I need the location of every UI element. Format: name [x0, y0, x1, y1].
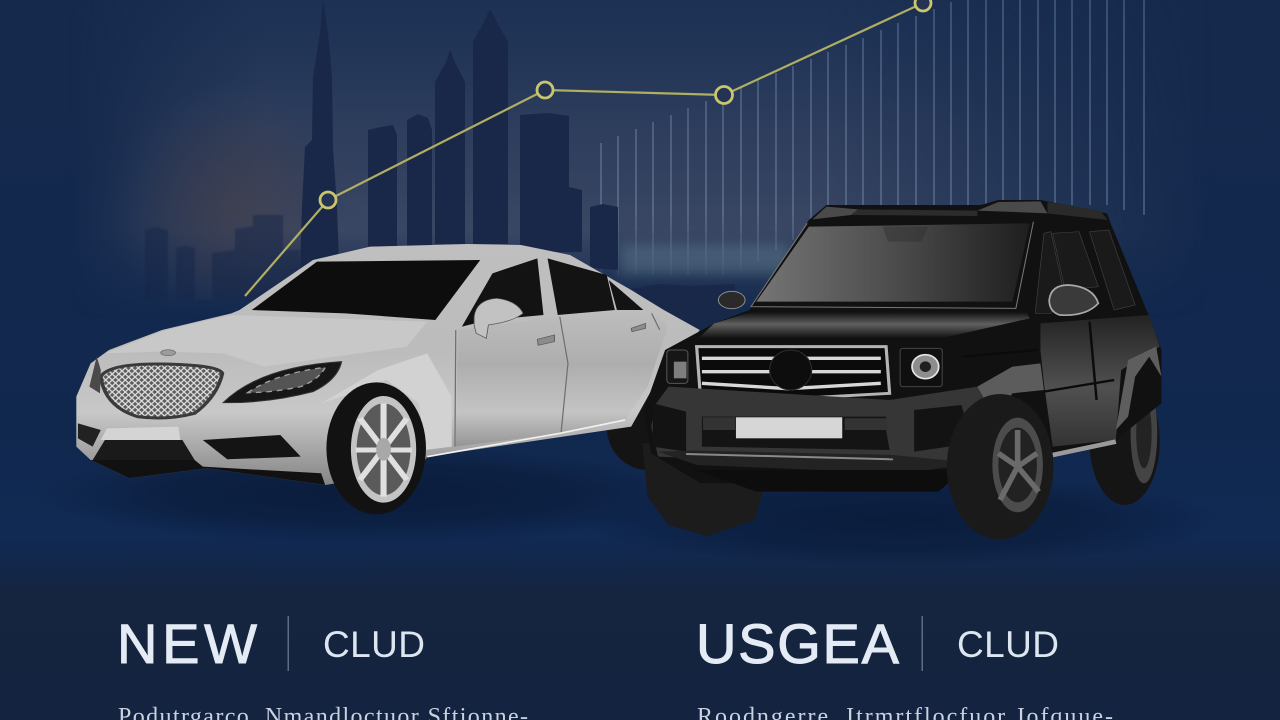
SUV front bumper	[651, 387, 993, 467]
SUV body	[644, 200, 1161, 483]
right column: used cars	[696, 612, 1113, 720]
heading: new: NEW	[117, 612, 257, 675]
SUV front right wheel	[947, 394, 1053, 539]
sedan front wheel	[326, 382, 426, 514]
sedan headlight left	[89, 357, 101, 393]
divider	[288, 616, 289, 671]
sedan side sill chrome	[427, 420, 625, 457]
SUV roof band	[851, 209, 977, 216]
sedan side mirror	[474, 298, 523, 338]
SUV windshield	[756, 223, 1030, 302]
heading: used: USGEA	[696, 612, 900, 675]
sedan headlight detail	[248, 367, 325, 393]
sedan windshield	[252, 260, 480, 320]
sedan front plate area	[101, 427, 180, 440]
SUV lower bar	[658, 451, 977, 473]
sedan door handles	[537, 323, 645, 345]
SUV plate side bars	[703, 417, 886, 430]
SUV side windows	[1035, 230, 1135, 313]
SUV lower grille	[702, 417, 890, 450]
subheading: CLUD	[957, 624, 1059, 665]
SUV side mirror left	[718, 291, 745, 309]
divider	[922, 616, 923, 671]
SUV side mirror right	[1049, 285, 1098, 315]
SUV windshield frame	[751, 222, 1033, 308]
SUV door lines	[963, 322, 1114, 400]
vertical data bars	[601, 0, 1144, 275]
SUV lower bar highlight	[686, 454, 893, 459]
sedan underbody	[91, 460, 325, 485]
sedan grille	[101, 364, 222, 418]
sedan right intake	[203, 435, 301, 459]
trend line chart	[245, 0, 931, 296]
SUV side panels	[1040, 315, 1160, 447]
SUV mirror mount	[883, 227, 928, 242]
sedan body	[76, 244, 700, 485]
sedan hood highlight	[105, 315, 427, 367]
sedan side windows	[462, 258, 643, 327]
SUV hood	[698, 313, 1030, 338]
SUV step bar	[1053, 442, 1116, 455]
ground shadows	[40, 447, 1220, 566]
SUV wheel arch	[977, 363, 1044, 420]
sedan fender highlight	[321, 353, 452, 450]
SUV grille	[697, 347, 890, 398]
SUV headlight right	[900, 348, 942, 387]
sedan emblem	[161, 350, 175, 356]
SUV underside	[697, 470, 963, 492]
sedan left fog vent	[78, 423, 101, 447]
city skyline	[145, 0, 735, 330]
sedan headlight	[223, 362, 342, 403]
black SUV	[642, 200, 1161, 539]
sedan door panels	[456, 310, 668, 447]
SUV grille emblem	[770, 350, 812, 390]
SUV fog vents	[653, 403, 972, 452]
left column: new cars	[117, 612, 528, 720]
SUV roof rails	[812, 201, 1047, 219]
sedan lower intake	[93, 440, 195, 460]
SUV headlight left	[667, 350, 688, 383]
sedan rear wheel	[607, 383, 688, 470]
silver sedan	[76, 244, 700, 514]
sedan door lines	[455, 313, 660, 447]
SUV rear flare	[1116, 347, 1161, 430]
SUV license plate	[736, 417, 842, 438]
SUV front left tyre	[642, 443, 763, 536]
SUV rear wheel	[1090, 378, 1160, 505]
subheading: CLUD	[323, 624, 425, 665]
SUV roof top	[1047, 202, 1108, 220]
